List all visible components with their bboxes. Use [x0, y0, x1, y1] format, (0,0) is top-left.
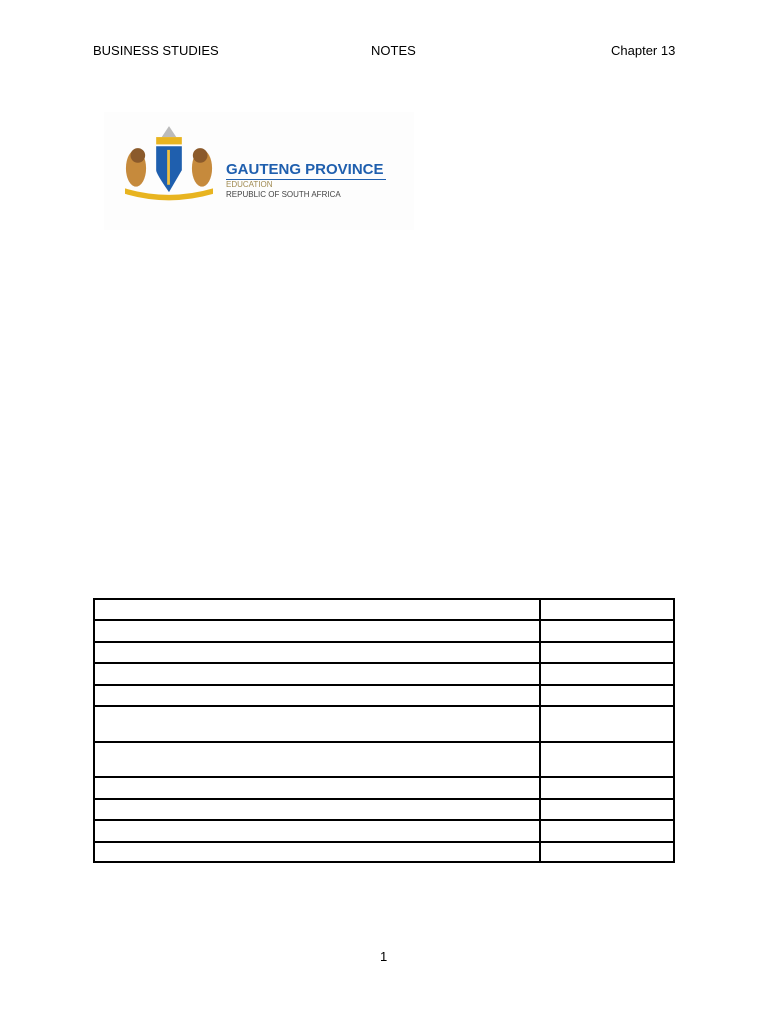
icon: coat of arms — [125, 126, 213, 200]
logo text: title: GAUTENG PROVINCE — [226, 161, 384, 178]
header: right: Chapter 13 — [611, 43, 675, 58]
page number: 1 — [380, 949, 387, 964]
logo — [104, 112, 414, 230]
logo text: republic: REPUBLIC OF SOUTH AFRICA — [226, 190, 341, 199]
logo text: education: EDUCATION — [226, 180, 273, 189]
header: center: NOTES — [371, 43, 416, 58]
header: left: BUSINESS STUDIES — [93, 43, 219, 58]
